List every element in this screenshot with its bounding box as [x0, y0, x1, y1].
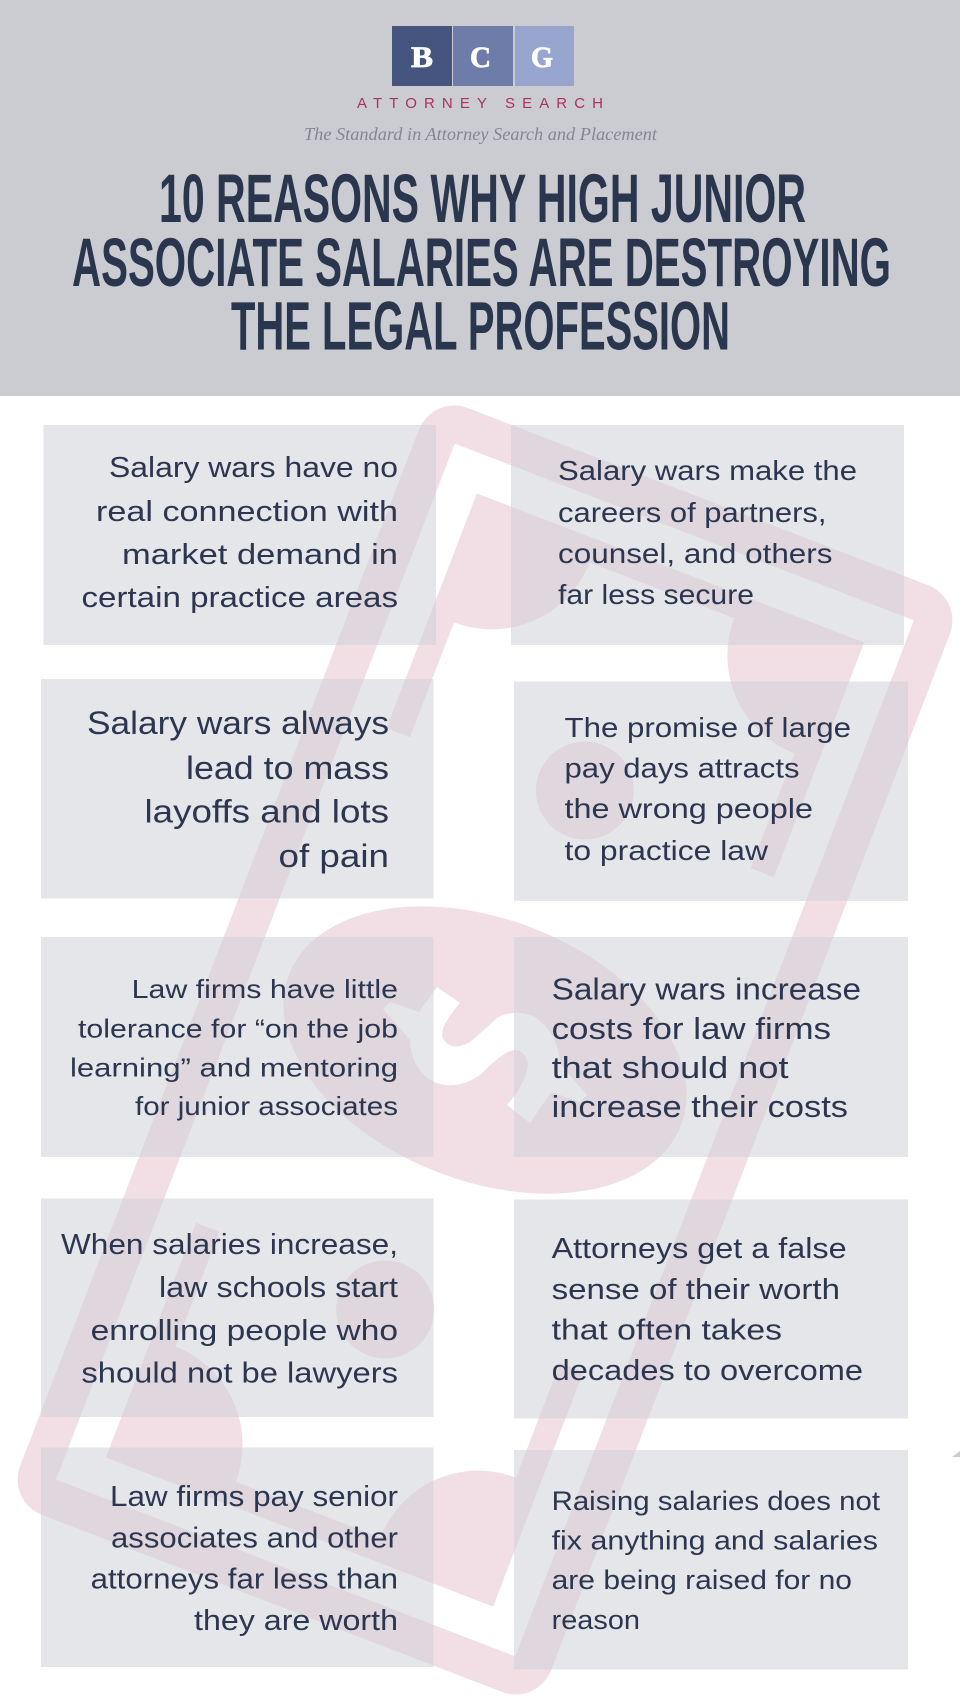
panel: reason 7: law schools start: [159, 1272, 398, 1304]
logo subtitle: ATTORNEY SEARCH: [357, 95, 603, 112]
panel: reason 9: attorneys far less than: [91, 1564, 398, 1596]
logo: BCG squares: G: [531, 41, 553, 74]
panel: reason 3: [41, 679, 434, 898]
panel: reason 3: lead to mass: [186, 750, 389, 786]
panel: reason 5: [41, 937, 434, 1157]
panel: reason 8: sense of their worth: [552, 1274, 840, 1306]
panel: reason 6: increase their costs: [552, 1089, 848, 1124]
panel: reason 3: of pain: [278, 838, 389, 874]
panel: reason 10: reason: [552, 1605, 640, 1635]
panel: reason 2: far less secure: [558, 579, 754, 610]
panel: reason 9: [41, 1448, 434, 1667]
title: [72, 160, 891, 364]
panel: reason 3: Salary wars always: [87, 705, 389, 741]
panel: reason 4: pay days attracts: [564, 752, 800, 784]
panel: reason 7: [41, 1198, 434, 1417]
tagline: The Standard in Attorney Search and Placement: [304, 124, 658, 144]
watermark: dollar bill icon: [6, 394, 960, 1706]
panel: reason 5: learning” and mentoring: [70, 1052, 398, 1082]
panel: reason 6: [514, 937, 908, 1157]
header band: [0, 0, 960, 396]
panel: reason 6: costs for law firms: [552, 1011, 831, 1046]
panel: reason 2: counsel, and others: [558, 538, 832, 569]
panel: reason 5: for junior associates: [135, 1091, 398, 1121]
logo: BCG squares: [392, 26, 574, 86]
panel: reason 2: careers of partners,: [558, 497, 826, 528]
panel: reason 4: The promise of large: [564, 712, 851, 743]
logo: BCG squares: C: [470, 41, 491, 74]
panel: reason 4: to practice law: [564, 835, 769, 866]
panel: reason 10: [514, 1450, 908, 1670]
panel: reason 2: [511, 425, 904, 645]
panel: reason 1: market demand in: [122, 539, 398, 571]
panel: reason 5: tolerance for “on the job: [78, 1014, 398, 1044]
panel: reason 7: enrolling people who: [91, 1315, 398, 1347]
panel: reason 2: Salary wars make the: [558, 455, 857, 486]
panel: reason 1: certain practice areas: [82, 582, 398, 614]
panel: reason 8: decades to overcome: [552, 1355, 863, 1387]
panel: reason 10: fix anything and salaries: [552, 1526, 878, 1556]
edge artifact mark: [952, 1451, 960, 1457]
panel: reason 4: [514, 682, 908, 901]
panel: reason 7: should not be lawyers: [81, 1358, 398, 1390]
panel: reason 7: When salaries increase,: [61, 1229, 398, 1261]
panel: reason 1: [44, 425, 436, 645]
panel: reason 10: Raising salaries does not: [552, 1486, 881, 1516]
panel: reason 9: they are worth: [194, 1605, 398, 1637]
panel: reason 4: the wrong people: [564, 793, 813, 824]
panel: reason 8: that often takes: [552, 1314, 782, 1346]
panel: reason 5: Law firms have little: [132, 974, 398, 1004]
panel: reason 8: Attorneys get a false: [552, 1233, 847, 1265]
panel: reason 3: layoffs and lots: [144, 794, 389, 830]
logo: BCG squares: B: [411, 41, 433, 74]
panel: reason 10: are being raised for no: [552, 1565, 852, 1595]
panel: reason 6: Salary wars increase: [552, 972, 861, 1006]
panel: reason 6: that should not: [552, 1050, 789, 1085]
panel: reason 9: associates and other: [111, 1522, 398, 1554]
panel: reason 9: Law firms pay senior: [110, 1481, 398, 1513]
panel: reason 1: real connection with: [96, 496, 398, 528]
panel: reason 1: Salary wars have no: [109, 452, 398, 484]
panel: reason 8: [514, 1200, 908, 1418]
